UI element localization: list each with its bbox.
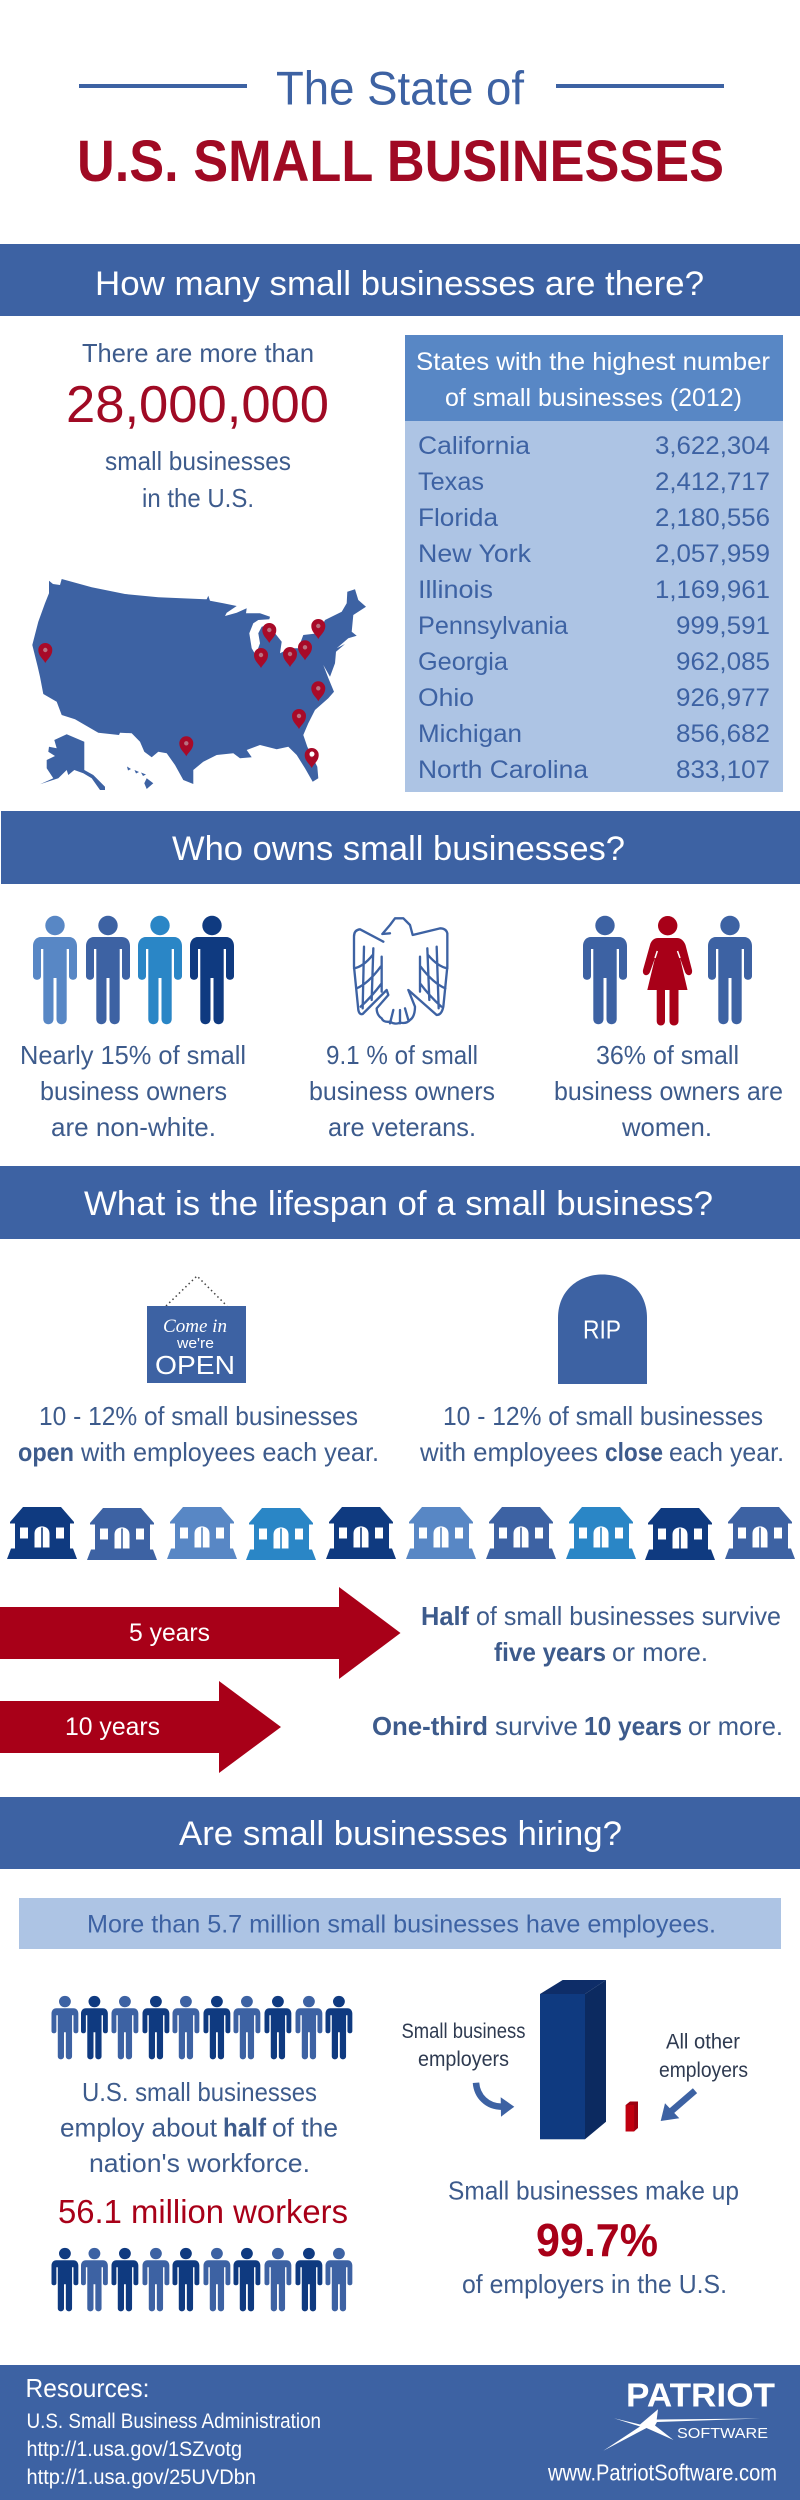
text: half of the workforce (60, 2077, 338, 2178)
map: Hawaii (127, 766, 153, 789)
text: half of the workforce: of the (272, 2112, 338, 2142)
title: U.S. SMALL BUSINESSES (77, 129, 724, 194)
table: states with the highest number: 999,591 (676, 612, 770, 640)
resources list: http://1.usa.gov/1SZvotg (26, 2438, 242, 2461)
table: states with the highest number: Michigan (418, 720, 522, 748)
table: states with the highest number: 2,057,959 (655, 540, 770, 568)
table: states with the highest number: New York (418, 540, 532, 568)
bar: small business employers (540, 1980, 606, 2139)
table: states with the highest number: Georgia (418, 648, 508, 676)
table: states with the highest number: 1,169,961 (655, 576, 770, 604)
text: businesses open each year (18, 1401, 379, 1467)
map pins (38, 619, 325, 768)
arrow: straight to small bar (661, 2091, 695, 2121)
text: veteran owners: are veterans. (328, 1112, 476, 1142)
text: half of the workforce: U.S. small businesses (82, 2077, 317, 2107)
section header: hiring: Are small businesses hiring? (179, 1815, 622, 1853)
stat: 56.1 million workers: 56.1 million workers (58, 2193, 348, 2230)
text: half of the workforce: half (223, 2112, 266, 2142)
bar: all other employers (626, 2102, 638, 2132)
text: veteran owners: business owners (309, 1076, 495, 1106)
label: small business employers: employers (418, 2048, 509, 2071)
section header: who owns: Who owns small businesses? (172, 830, 625, 868)
icon row: workers bottom (52, 2248, 352, 2311)
logo: Patriot Software: SOFTWARE (677, 2426, 768, 2442)
text: businesses close each year: with employees (419, 1437, 598, 1467)
text: half survive five years: five years (494, 1637, 606, 1667)
icon: open sign: OPEN (155, 1350, 235, 1380)
table: states with the highest number: States with the highest number (416, 348, 770, 376)
arrow: 5 years: 5 years (129, 1619, 210, 1647)
icon: tombstone (558, 1274, 647, 1384)
text: one-third survive ten years: 10 years (584, 1711, 682, 1741)
table: states with the highest number (405, 335, 783, 792)
arrow: curved to large bar (476, 2083, 514, 2117)
text: businesses close each year: close (605, 1437, 663, 1467)
banner: 5.7 million businesses have employees (19, 1898, 781, 1949)
text: half of the workforce: employ about (60, 2112, 218, 2142)
arrow: 5 years (0, 1587, 400, 1679)
icon: open sign: Come in (163, 1316, 227, 1337)
text: non-white owners: Nearly 15% of small (20, 1040, 246, 1070)
text: women owners: women. (621, 1112, 712, 1142)
label: all other employers: All other (666, 2030, 740, 2054)
label: small business employers: Small business (402, 2020, 526, 2043)
text: non-white owners: are non-white. (51, 1112, 216, 1142)
table: states with the highest number: Florida (418, 504, 498, 532)
table: states with the highest number: 3,622,304 (655, 432, 770, 460)
text: businesses open each year: open (18, 1437, 74, 1467)
table: states with the highest number: Texas (418, 468, 484, 496)
icon: two men and a woman (583, 916, 752, 1026)
label: all other employers: employers (659, 2059, 748, 2082)
label: small business employers (402, 2020, 526, 2071)
table: states with the highest number: 2,180,556 (655, 504, 770, 532)
resources list (26, 2373, 321, 2489)
text: half of the workforce: nation's workforce. (89, 2148, 310, 2178)
text: businesses open each year: with employees each year. (80, 1437, 379, 1467)
logo: Patriot Software (547, 2377, 777, 2486)
section header: how many: How many small businesses are there? (95, 265, 704, 303)
table: states with the highest number: 962,085 (676, 648, 770, 676)
text: non-white owners: business owners (40, 1076, 227, 1106)
map: United States with pins (32, 579, 366, 790)
text: veteran owners: 9.1 % of small (326, 1040, 478, 1070)
table: states with the highest number: Ohio (418, 684, 474, 712)
section header: hiring (0, 1797, 800, 1869)
text: women owners: 36% of small (596, 1040, 739, 1070)
icon: open sign (147, 1276, 246, 1383)
table: states with the highest number: 926,977 (676, 684, 770, 712)
stat: 99.7% of employers: 99.7% (536, 2214, 658, 2266)
footer panel (0, 2365, 800, 2500)
arrow: 10 years: 10 years (65, 1713, 160, 1741)
chart: small business vs other employers (402, 1980, 748, 2139)
map: Alaska (40, 734, 105, 790)
table: states with the highest number: Pennsylvania (418, 612, 568, 640)
icon: tombstone: RIP (583, 1314, 621, 1344)
table: states with the highest number: 833,107 (676, 756, 770, 784)
arrow: 10 years (0, 1681, 281, 1773)
resources list: Resources: (26, 2373, 150, 2403)
text: businesses open each year: 10 - 12% of small businesses (39, 1401, 358, 1431)
callout: 28,000,000 small businesses (66, 338, 329, 513)
table: states with the highest number: 2,412,717 (655, 468, 770, 496)
table: states with the highest number: California (418, 432, 530, 460)
callout: 28,000,000 small businesses: 28,000,000 (66, 376, 329, 434)
icon row: ten storefronts (7, 1507, 795, 1560)
banner: 5.7 million businesses have employees: More than 5.7 million small businesses have employees. (87, 1910, 716, 1938)
icon row: workers top (52, 1996, 352, 2059)
text: half survive five years: Half (421, 1601, 469, 1631)
icon: four people (33, 916, 234, 1024)
stat: 99.7% of employers: of employers in the U.S. (462, 2269, 727, 2299)
table: states with the highest number: 856,682 (676, 720, 770, 748)
section header: lifespan: What is the lifespan of a small business? (84, 1185, 713, 1223)
section header: how many (0, 244, 800, 316)
text: businesses close each year: 10 - 12% of small businesses (443, 1401, 763, 1431)
section header: lifespan (0, 1166, 800, 1239)
label: all other employers (659, 2030, 748, 2082)
table: states with the highest number: North Carolina (418, 756, 588, 784)
text: women owners: business owners are (554, 1076, 783, 1106)
logo: Patriot Software: PATRIOT (626, 2377, 775, 2414)
text: women owners (554, 1040, 783, 1142)
text: one-third survive ten years: or more. (688, 1711, 783, 1741)
text: businesses close each year: each year. (669, 1437, 784, 1467)
text: half survive five years (421, 1601, 781, 1667)
text: half survive five years: or more. (612, 1637, 708, 1667)
icon: open sign: we're (176, 1335, 214, 1352)
title: The State of (276, 62, 525, 114)
table: states with the highest number: of small businesses (2012) (445, 384, 742, 412)
text: businesses close each year (419, 1401, 784, 1467)
icon: eagle (354, 918, 447, 1024)
table: states with the highest number: Illinois (418, 576, 493, 604)
callout: 28,000,000 small businesses: small businesses (105, 446, 291, 476)
text: half survive five years: of small businesses survive (476, 1601, 781, 1631)
stat: 99.7% of employers: Small businesses make up (448, 2176, 739, 2206)
section header: who owns (1, 811, 800, 884)
resources list: U.S. Small Business Administration (26, 2410, 321, 2433)
callout: 28,000,000 small businesses: There are more than (82, 338, 314, 368)
text: veteran owners (309, 1040, 495, 1142)
stat: 99.7% of employers (448, 2176, 739, 2299)
callout: 28,000,000 small businesses: in the U.S. (142, 483, 254, 513)
text: non-white owners (20, 1040, 246, 1142)
text: one-third survive ten years: One-third (372, 1711, 488, 1741)
text: one-third survive ten years: survive (495, 1711, 578, 1741)
title (77, 62, 724, 194)
resources list: http://1.usa.gov/25UVDbn (26, 2466, 256, 2489)
text: one-third survive ten years (372, 1711, 783, 1741)
